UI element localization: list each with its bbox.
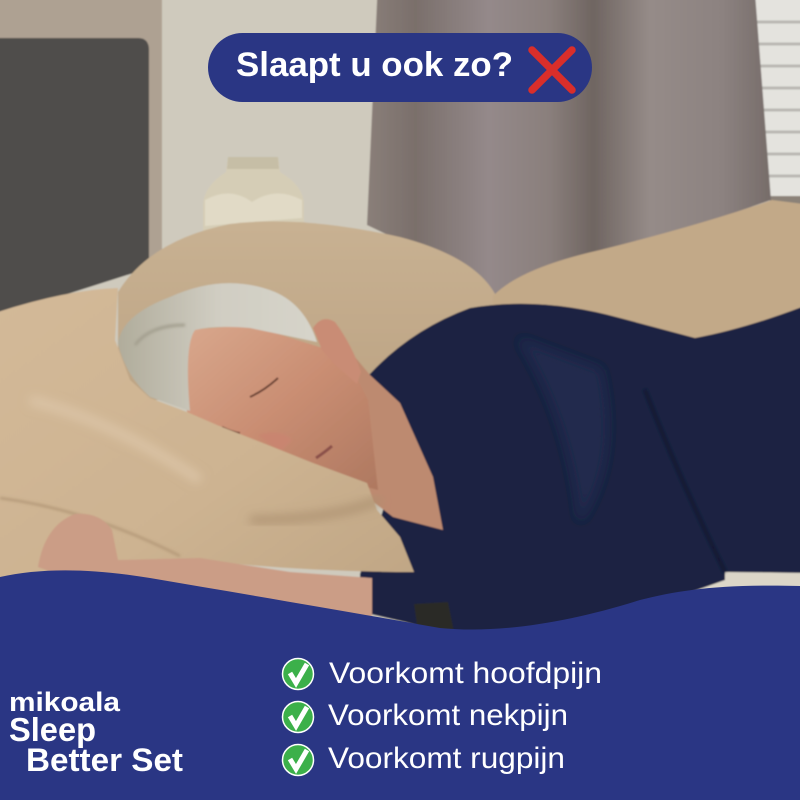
front pillow	[0, 288, 414, 590]
wrist watch	[414, 602, 454, 632]
white hair	[118, 283, 317, 411]
man's face	[187, 319, 378, 490]
ear	[313, 319, 361, 384]
right duvet pillow	[493, 200, 800, 340]
forearm and hand	[38, 514, 372, 622]
window blinds	[752, 0, 800, 210]
icon: green check	[282, 702, 314, 732]
heading text: Slaapt u ook zo?	[236, 46, 513, 84]
grey curtain	[367, 0, 771, 300]
brand logo text: Better Set	[26, 742, 183, 778]
brand logo text: mikoala	[9, 687, 121, 717]
brand logo text: Sleep	[9, 711, 96, 748]
pill heading	[208, 33, 592, 102]
icon: green check	[282, 744, 314, 776]
bed sheet strip	[700, 570, 800, 600]
benefit: hoofdpijn: Voorkomt hoofdpijn	[329, 657, 602, 690]
blue wave footer panel	[0, 570, 800, 800]
headboard	[0, 38, 149, 322]
ceramic vase	[203, 157, 304, 232]
icon: red cross	[532, 50, 572, 90]
benefit: nekpijn: Voorkomt nekpijn	[328, 699, 568, 732]
benefit: rugpijn: Voorkomt rugpijn	[328, 742, 565, 775]
brand logo text	[9, 687, 183, 778]
man's body in navy shirt	[360, 300, 800, 632]
back pillow	[118, 221, 498, 400]
icon: green check	[282, 658, 314, 690]
neck	[320, 345, 443, 530]
